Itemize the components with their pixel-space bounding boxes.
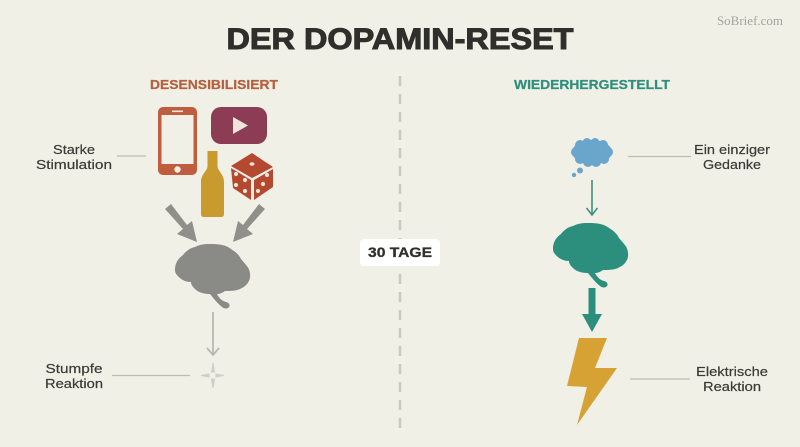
arrow: right into brain	[233, 204, 265, 242]
icon: bottle	[201, 151, 224, 217]
arrow: left into brain	[165, 204, 197, 242]
icon: gray brain	[175, 244, 250, 308]
arrow: thick teal	[582, 288, 602, 332]
icon: faint spark	[201, 363, 224, 388]
icon: dice	[231, 153, 273, 200]
icon: teal brain	[553, 223, 628, 288]
badge: 30 Tage	[360, 239, 440, 266]
icon: smartphone	[158, 107, 197, 175]
label: starke stimulation: Starke	[53, 142, 95, 157]
icon: thought cloud	[571, 138, 613, 177]
label: elektrische reaktion	[630, 364, 768, 394]
icon: lightning bolt	[567, 338, 617, 425]
label: elektrische reaktion: Elektrische	[696, 364, 768, 379]
label: starke stimulation: Stimulation	[36, 157, 112, 172]
arrow: thin teal	[586, 180, 598, 215]
heading: wiederhergestellt: WIEDERHERGESTELLT	[514, 78, 670, 92]
icon: video player	[211, 107, 267, 144]
label: ein einziger gedanke	[628, 142, 771, 172]
label: elektrische reaktion: Reaktion	[703, 379, 761, 394]
panel: desensibilisiert	[36, 78, 278, 391]
badge: 30 Tage: 30 TAGE	[368, 244, 432, 260]
panel: wiederhergestellt	[514, 78, 771, 425]
heading: desensibilisiert: DESENSIBILISIERT	[150, 78, 278, 92]
label: stumpfe reaktion: Reaktion	[45, 376, 103, 391]
arrow: thin gray	[207, 312, 219, 355]
label: stumpfe reaktion: Stumpfe	[46, 361, 102, 376]
label: ein einziger gedanke: Gedanke	[703, 157, 761, 172]
label: stumpfe reaktion	[45, 361, 190, 391]
title: DER DOPAMIN-RESET	[226, 23, 574, 56]
watermark: SoBrief.com	[717, 13, 783, 28]
label: ein einziger gedanke: Ein einziger	[694, 142, 771, 157]
label: starke stimulation	[36, 142, 146, 172]
